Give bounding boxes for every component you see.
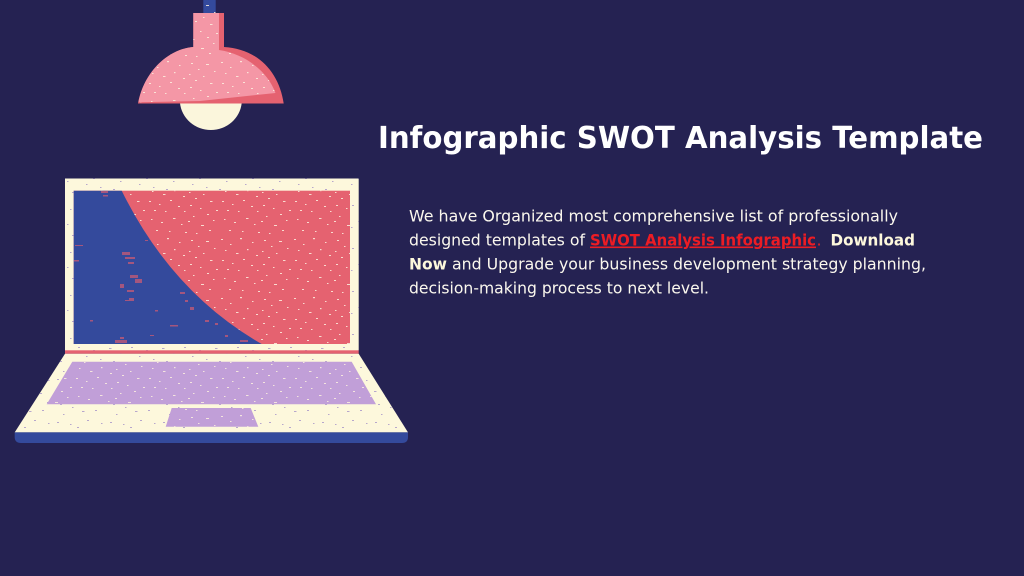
trackpad	[166, 408, 258, 427]
text block: description: .	[816, 230, 822, 250]
text block: description: designed templates of	[409, 230, 585, 250]
blue area grain	[74, 191, 248, 343]
text block: description: decision-making process to next level.	[409, 278, 709, 298]
lamp cord	[203, 0, 216, 14]
icon: hanging lamp	[138, 0, 284, 130]
icon: laptop	[15, 178, 408, 443]
title: Infographic SWOT Analysis Template	[378, 121, 983, 156]
text block: description: Download	[830, 230, 915, 250]
light bulb	[180, 103, 242, 130]
lamp shade	[138, 13, 284, 104]
link: SWOT Analysis Infographic: SWOT Analysis Infographic	[590, 230, 816, 250]
laptop lid	[65, 178, 359, 350]
text block: description	[409, 206, 926, 298]
text block: description: Now	[409, 254, 447, 274]
laptop front edge	[15, 432, 408, 443]
hinge	[65, 350, 359, 354]
text block: description: We have Organized most comprehensive list of professionally	[409, 206, 898, 226]
laptop base	[15, 354, 408, 432]
laptop screen	[74, 191, 350, 344]
keyboard	[47, 362, 376, 404]
text block: description: and Upgrade your business development strategy planning,	[452, 254, 926, 274]
